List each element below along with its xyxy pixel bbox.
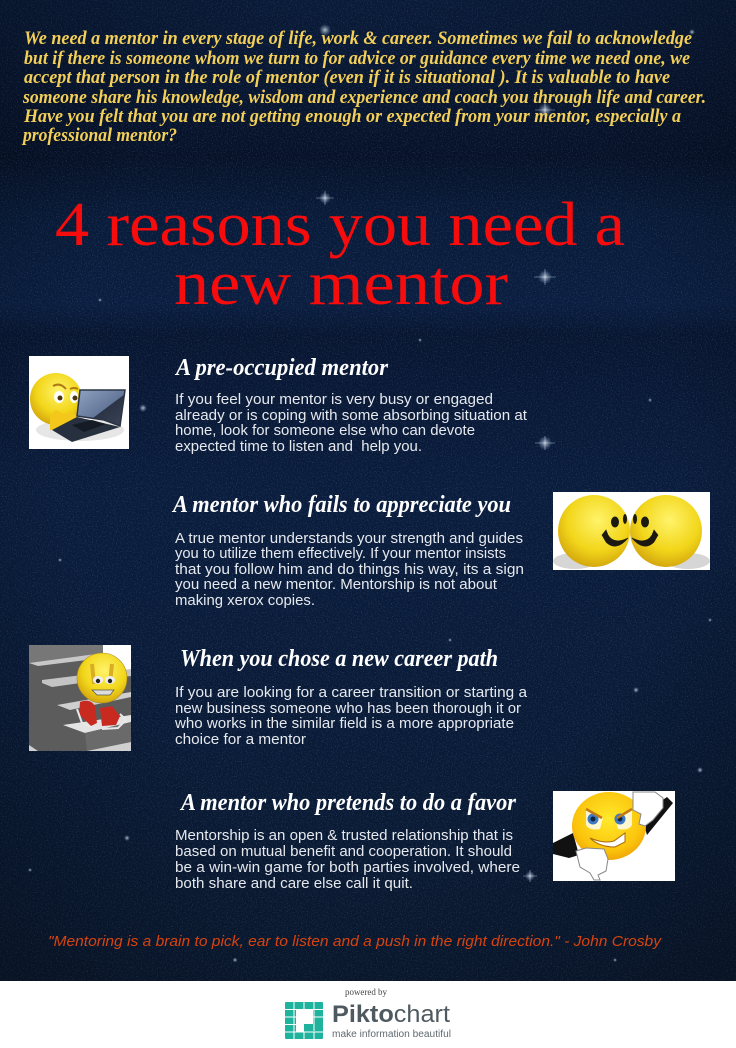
icon: Piktochart logo [285, 1002, 323, 1039]
text block: both share and care else call it quit. [175, 875, 413, 892]
text block [175, 530, 524, 609]
text block: If you are looking for a career transition or starting a [175, 684, 528, 701]
text block: A true mentor understands your strength and guides [175, 530, 523, 547]
powered by label: powered by [345, 987, 387, 997]
tagline: make information beautiful [332, 1029, 451, 1040]
intro paragraph: professional mentor? [21, 125, 177, 146]
heading: A mentor who pretends to do a favor [179, 790, 517, 816]
text block: home, look for someone else who can devote [175, 422, 475, 439]
text block [175, 827, 520, 892]
text block: who works in the similar field is a more appropriate [174, 715, 514, 732]
title: 4 reasons you need a [55, 191, 625, 259]
text block: new business someone who has been thorough it or [175, 700, 521, 717]
text block: that you follow him and do things his way, its a sign [175, 561, 524, 578]
heading: A mentor who fails to appreciate you [171, 492, 511, 518]
text block: you need a new mentor. Mentorship is not about [175, 576, 498, 593]
text block [175, 391, 528, 455]
intro paragraph: but if there is someone whom we turn to for advice or guidance every time we need one, we [24, 48, 691, 69]
text block: making xerox copies. [175, 592, 315, 609]
wordmark: Piktochart [332, 1001, 450, 1028]
icon: emoji with laptop [29, 356, 129, 449]
text block: If you feel your mentor is very busy or engaged [175, 391, 493, 408]
intro paragraph: accept that person in the role of mentor (even if it is situational ). It is valuable to have [24, 67, 671, 88]
text block [174, 684, 528, 748]
icon: two smiling balls [553, 492, 710, 570]
title: new mentor [174, 250, 508, 318]
text block: you to utilize them effectively. If your mentor insists [175, 545, 506, 562]
panel: when you chose a new career path [29, 645, 528, 751]
icon: emoji sitting on stairs [29, 645, 131, 751]
quote: "Mentoring is a brain to pick, ear to listen and a push in the right direction." - John Crosby [48, 933, 663, 950]
text block: be a win-win game for both parties involved, where [175, 859, 520, 876]
panel: a mentor who pretends to do a favor [175, 790, 675, 892]
icon: angry emoji with thumbs down [553, 791, 675, 881]
panel: a mentor who fails to appreciate you [171, 492, 710, 609]
panel: a pre-occupied mentor [29, 355, 528, 455]
text block: based on mutual benefit and cooperation. It should [175, 843, 512, 860]
intro paragraph [21, 28, 706, 146]
text block: choice for a mentor [175, 731, 306, 748]
intro paragraph: someone share his knowledge, wisdom and experience and coach you through life and career. [22, 87, 706, 108]
footer: powered by Piktochart [0, 981, 736, 1048]
heading: A pre-occupied mentor [174, 355, 389, 381]
text block: Mentorship is an open & trusted relationship that is [175, 827, 513, 844]
text block: already or is coping with some absorbing situation at [175, 407, 528, 424]
intro paragraph: Have you felt that you are not getting enough or expected from your mentor, especially a [23, 106, 681, 127]
text block: expected time to listen and help you. [175, 438, 422, 455]
intro paragraph: We need a mentor in every stage of life, work & career. Sometimes we fail to acknowledge [24, 28, 693, 49]
title [55, 191, 625, 318]
heading: When you chose a new career path [180, 646, 498, 672]
